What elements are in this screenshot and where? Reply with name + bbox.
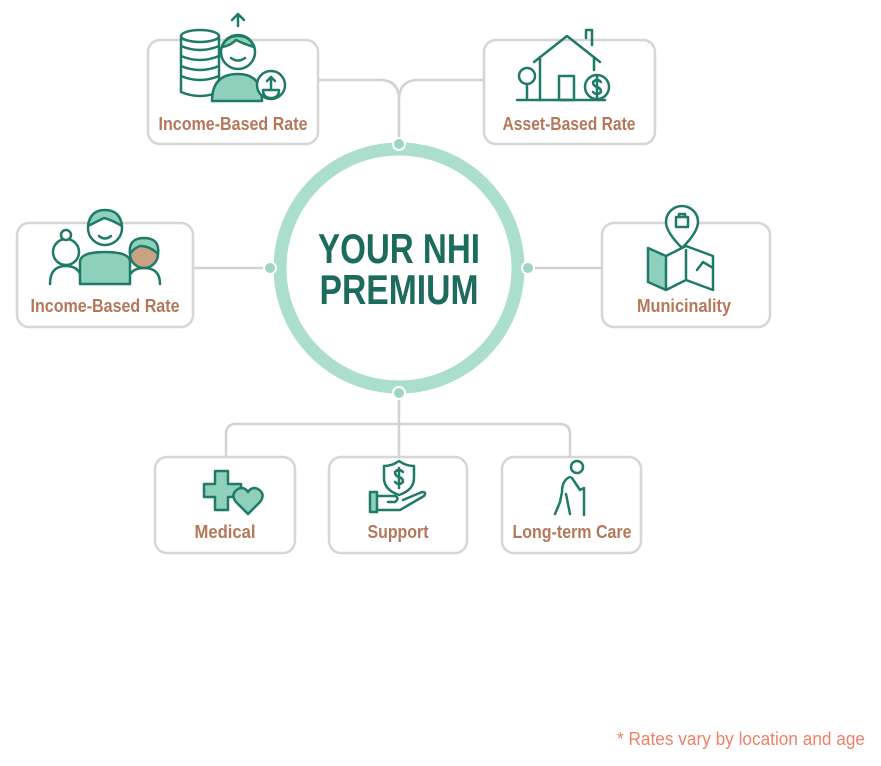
connectors (193, 80, 602, 457)
center circle: PREMIUM (320, 266, 478, 313)
label: Asset-Based Rate (502, 114, 636, 134)
label: Medical (194, 522, 256, 542)
icon: cross and heart (204, 471, 263, 514)
icon: house (517, 30, 609, 100)
icon: map pin (648, 206, 713, 290)
panel: municipality (602, 206, 770, 327)
label: Income-Based Rate (30, 296, 180, 316)
footnote: * Rates vary by location and age (617, 729, 865, 749)
icon: coins and person (181, 14, 285, 101)
panel: long-term care (502, 457, 641, 553)
panel: asset-based rate (484, 30, 655, 144)
label: Support (368, 522, 428, 542)
label: Municinality (637, 296, 731, 316)
icon: family (50, 210, 160, 284)
label: Income-Based Rate (158, 114, 308, 134)
label: Long-term Care (512, 522, 632, 542)
icon: hand and shield (370, 461, 425, 512)
panel: income-based rate left (17, 210, 193, 327)
center circle (264, 138, 534, 399)
title: YOUR NHI (318, 225, 480, 272)
icon: elderly with cane (555, 461, 584, 515)
panel: medical (155, 457, 295, 553)
panel: support (329, 457, 467, 553)
panel: income-based rate top (148, 14, 318, 144)
